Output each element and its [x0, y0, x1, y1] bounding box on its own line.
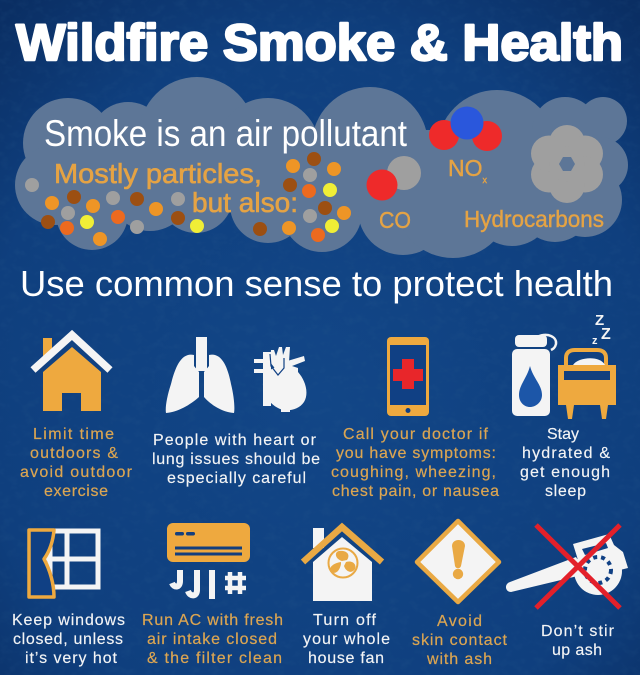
heading: common sense: Use common sense to protect health	[20, 263, 613, 304]
text: limit time: Limit time	[33, 426, 114, 443]
text: avoid skin contact: skin contact	[412, 632, 508, 649]
text: don't stir	[541, 623, 615, 659]
text: stay hydrated: Stay	[547, 426, 579, 443]
text: keep windows closed	[12, 612, 125, 667]
text: limit time: outdoors &	[30, 445, 118, 462]
hydrocarbon molecule	[531, 125, 603, 203]
text: turn off fan	[303, 612, 390, 667]
NOx molecule	[429, 106, 502, 151]
text: call your doctor	[331, 426, 499, 500]
cloud shape	[15, 77, 628, 258]
text: limit time: exercise	[44, 483, 108, 500]
icon: warning diamond	[417, 521, 499, 602]
text: avoid skin contact: Avoid	[437, 613, 482, 630]
title: Wildfire Smoke & Health	[16, 14, 623, 71]
text: people with heart or lung issues: People with heart or	[153, 432, 317, 449]
text: call your doctor: chest pain, or nausea	[332, 483, 499, 500]
text: avoid skin contact	[412, 613, 508, 668]
tip: heart and lung issues	[152, 337, 320, 487]
particles label: but also:	[192, 187, 298, 218]
text: stay hydrated: sleep	[545, 483, 586, 500]
tip: hydration and sleep	[512, 312, 616, 500]
tip: do not stir up ash	[506, 525, 628, 659]
icon: water bottle	[512, 335, 556, 416]
icon: window and curtain	[29, 530, 98, 597]
CO label: CO	[379, 207, 411, 233]
tip: avoid ash	[412, 521, 508, 668]
text: call your doctor: coughing, wheezing,	[331, 464, 496, 481]
icon: sleeping z's: Z	[595, 312, 604, 329]
tip: keep windows closed	[12, 530, 125, 667]
smoke heading: Smoke is an air pollutant	[44, 113, 408, 154]
icon: sleeping z's	[592, 312, 611, 347]
tip: whole house fan	[303, 527, 390, 667]
NOx label: x	[482, 175, 488, 185]
text: stay hydrated: hydrated &	[522, 445, 610, 462]
text: keep windows closed: Keep windows	[12, 612, 125, 629]
icon: crossed-out leaf blower	[506, 525, 628, 608]
text: run AC: air intake closed	[147, 631, 277, 648]
particles label: Mostly particles,	[54, 158, 262, 189]
CO molecule	[366, 156, 421, 200]
icon: bed	[558, 350, 616, 419]
tip: call your doctor	[331, 337, 499, 500]
icon: lungs	[166, 337, 234, 413]
text: stay hydrated: get enough	[520, 464, 610, 481]
text: call your doctor: you have symptoms:	[336, 445, 496, 462]
panel: smoke cloud	[15, 77, 628, 258]
icon: sleeping z's: z	[592, 335, 598, 347]
icon: air conditioner	[167, 523, 250, 599]
hydrocarbons label: Hydrocarbons	[464, 206, 604, 232]
text: don't stir: up ash	[552, 642, 602, 659]
text: keep windows closed: closed, unless	[13, 631, 123, 648]
text: avoid skin contact: with ash	[426, 651, 492, 668]
text: people with heart or lung issues	[152, 432, 320, 487]
text: people with heart or lung issues: especially careful	[167, 470, 306, 487]
text: keep windows closed: it’s very hot	[25, 650, 118, 667]
text: run AC	[142, 612, 283, 667]
icon: house with fan	[303, 527, 382, 601]
text: stay hydrated	[520, 426, 610, 500]
particle dots	[25, 152, 351, 246]
text: turn off fan: house fan	[308, 650, 384, 667]
text: turn off fan: Turn off	[313, 612, 377, 629]
particles label	[54, 158, 298, 218]
text: limit time	[20, 426, 133, 500]
text: run AC: & the filter clean	[147, 650, 282, 667]
icon: house	[33, 335, 110, 411]
tip: limit time outdoors	[20, 335, 133, 500]
icon: phone	[387, 337, 429, 416]
icon: heart	[254, 347, 306, 412]
text: people with heart or lung issues: lung issues should be	[152, 451, 320, 468]
text: don't stir: Don’t stir	[541, 623, 615, 640]
tip: run AC	[142, 523, 283, 667]
text: run AC: Run AC with fresh	[142, 612, 283, 629]
icon: sleeping z's: Z	[601, 326, 611, 343]
text: call your doctor: Call your doctor if	[343, 426, 489, 443]
NOx label: NO	[448, 155, 482, 181]
text: limit time: avoid outdoor	[20, 464, 133, 481]
text: turn off fan: your whole	[303, 631, 390, 648]
